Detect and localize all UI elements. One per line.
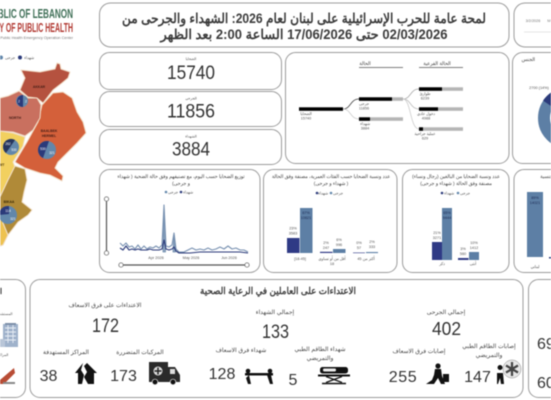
- bars: 18-45: 3583: [289, 232, 297, 236]
- map labels: BIKAA: [4, 200, 15, 204]
- panel: foreigners: [528, 280, 551, 398]
- chart legend: شهداء: [444, 190, 455, 196]
- stat: damaged vehicles: المركبات المتضررة: [116, 349, 164, 356]
- panel: adults by gender bar chart: [402, 170, 509, 272]
- panel: gender donut: الجنس: [522, 57, 535, 63]
- map pie: Bikaa: 114: [5, 209, 11, 213]
- bars: male: 21%: [433, 231, 441, 235]
- tree node: martyrs: [359, 117, 403, 130]
- bars: female: 1412: [470, 246, 478, 250]
- map pie: Mount Lebanon: 530: [11, 148, 17, 152]
- stat: ambulance team injuries: [389, 348, 446, 386]
- map legend: شهداء: [24, 55, 35, 60]
- slicer: status: الحالة: [359, 61, 371, 67]
- stat: medical staff martyrs: [289, 346, 346, 389]
- region: Baalbek-Hermel: [15, 92, 86, 181]
- tree node: total: [299, 107, 343, 120]
- map labels: BAALBEK: [41, 129, 58, 133]
- icon: running medic: [426, 363, 449, 384]
- stat: attacks on ambulance teams: [69, 302, 142, 337]
- map pie: North: 2: [18, 100, 20, 104]
- tree node: martyrs: شهداء: [360, 121, 371, 126]
- logo header: [0, 6, 74, 40]
- map pie: Baalbek-Hermel: [38, 141, 56, 159]
- chart title: [272, 174, 390, 187]
- stat: medical staff injuries: والتمريضي: [476, 352, 503, 359]
- stat: targeted centers: 38: [40, 368, 58, 385]
- bars: male: 9444: [443, 216, 451, 220]
- bars: under 18: 247: [323, 246, 329, 250]
- stat: ambulance team martyrs: شهداء فرق الاسعاف: [216, 347, 266, 354]
- bars: under 18: 2%: [323, 241, 329, 245]
- bars: over 45: 57: [357, 246, 361, 250]
- bars: 18-45: 10621: [301, 216, 311, 220]
- bar: Lebanese: [527, 192, 543, 269]
- bars: female: 560: [460, 252, 466, 256]
- bars: under 18: [318, 238, 346, 266]
- stat: ambulance team injuries: 255: [389, 369, 417, 386]
- tree node: regular admission: [417, 107, 463, 120]
- icon: ambulance: [149, 362, 180, 385]
- bars: male: 65%: [443, 211, 451, 215]
- stat: medical staff martyrs: والتمريضي: [307, 355, 334, 362]
- bars: female: 3%: [460, 247, 466, 251]
- logo header: Public Health Emergency Operation Center: [0, 36, 74, 40]
- panel: decomposition tree: [286, 52, 509, 164]
- stat: total wounded: 402: [432, 319, 461, 339]
- bars: female: 10%: [470, 241, 478, 245]
- chart title: مصنفة وفق الحالة ( شهداء و جرحى): [420, 181, 492, 187]
- chart legend: شهداء: [183, 190, 194, 194]
- stat: medical staff injuries: 147: [464, 369, 491, 386]
- chart title: و جرحى): [172, 181, 191, 187]
- stat: attacks on ambulance teams: 172: [92, 316, 119, 337]
- bars: under 18: 996: [336, 243, 342, 247]
- chart legend: [165, 190, 194, 194]
- chart title: ( شهداء و جرحى): [314, 181, 349, 187]
- map labels: HERMEL: [42, 134, 56, 138]
- KPI: wounded: الجرحى: [185, 96, 197, 100]
- stat: total martyrs: 133: [262, 322, 289, 343]
- chart legend: جرحى: [333, 192, 344, 196]
- map pie: North: [16, 95, 28, 107]
- map labels: NORTH: [9, 116, 22, 120]
- x axis labels: May 2026: [183, 256, 199, 260]
- vertical range slider: [104, 197, 109, 255]
- stat: targeted centers: [40, 349, 89, 385]
- region: North: [0, 91, 41, 136]
- tree node: total: 15740: [301, 116, 311, 120]
- bars: over 45: 333: [369, 245, 375, 249]
- chart title: توزيع الضحايا حسب اليوم، مع تصنيفهم وفق حالة الضحية ( شهداء: [117, 174, 245, 180]
- bars: female: [458, 241, 479, 266]
- map legend: جرحى: [5, 56, 16, 60]
- icon: hospital bed: [318, 367, 350, 384]
- icon: damaged center: [0, 368, 15, 384]
- icon: damaged house: [75, 363, 97, 384]
- stat: targeted centers: المراكز المستهدفة: [43, 349, 89, 356]
- stat: medical staff injuries: إصابات الطاقم الطبي: [462, 343, 516, 350]
- KPI: total casualties: 15740: [167, 63, 215, 84]
- tree node: martyrs: 3884: [361, 126, 369, 130]
- icon: stretcher carriers: [245, 369, 273, 384]
- bars: male: 3271: [433, 236, 441, 240]
- tree node: wounded: جرحى: [359, 102, 370, 106]
- tree node: regular admission: 4988: [422, 116, 430, 120]
- slicer: status: [359, 61, 403, 68]
- KPI: martyrs: [100, 130, 282, 164]
- chart legend: شهداء: [318, 190, 329, 196]
- line series: [120, 205, 248, 253]
- KPI: wounded: 11856: [167, 102, 215, 122]
- map pie: Mount Lebanon: 262: [5, 142, 11, 146]
- tree node: total: الضحايا: [300, 111, 312, 116]
- bars: 18-45: 67%: [302, 211, 310, 215]
- stat: total wounded: إجمالي الجرحى: [427, 309, 466, 316]
- tree node: surgery: 629: [422, 136, 428, 140]
- map pie: Mount Lebanon: [3, 139, 19, 155]
- tree node: emergency: طوارئ: [420, 91, 430, 96]
- panel heading: الاعتداءات على العاملين في الرعاية الصحية: [200, 286, 356, 297]
- panel: attacks on healthcare workers: [30, 280, 523, 398]
- chart title: [117, 174, 245, 187]
- tree node: regular admission: دخول عادي: [417, 111, 435, 116]
- chart title: عدد ونسبة الضحايا من البالغين (رجال ونساء): [412, 174, 500, 180]
- bars: 18-45: [18-45]: [294, 257, 306, 261]
- panel: gender donut: [512, 52, 551, 164]
- tree node: wounded: [359, 97, 403, 110]
- stat: medical staff martyrs: شهداء الطاقم الطبي: [294, 346, 346, 353]
- stat: total wounded: [427, 309, 466, 339]
- bar: Lebanese: لبناني: [531, 264, 539, 269]
- chart legend: جرحى: [460, 192, 471, 196]
- chart legend: جرحى: [168, 190, 179, 194]
- bars: under 18: أقل من أو تساوي: [318, 255, 346, 261]
- tree node: wounded: 11856: [359, 106, 369, 110]
- panel: title: [100, 3, 509, 47]
- stat: ambulance team injuries: إصابات فرق الاسعاف: [393, 348, 446, 355]
- x axis labels: Jun 2026: [221, 256, 237, 260]
- panel: date filter: [514, 3, 551, 47]
- bars: over 45: 2%: [369, 240, 375, 244]
- chart legend: [441, 190, 471, 196]
- bars: 18-45: 23%: [289, 226, 297, 230]
- bars: 18-45: [287, 208, 312, 261]
- stat: attacks on ambulance teams: الاعتداءات على فرق الاسعاف: [69, 302, 142, 309]
- KPI: martyrs: الشهداء: [185, 134, 197, 138]
- map pie: Baalbek-Hermel: 530: [40, 147, 46, 151]
- region: Mount Lebanon: [0, 131, 25, 197]
- stat: damaged vehicles: [110, 349, 164, 385]
- map pie: Baalbek-Hermel: 321: [49, 151, 55, 155]
- bars: over 45: [353, 240, 378, 261]
- map of Lebanon: [0, 63, 86, 246]
- KPI: total casualties: الضحايا: [186, 56, 196, 61]
- map labels: [0, 85, 58, 204]
- panel: age group bar chart: [264, 170, 397, 272]
- chart title: عدد ونسبة الضحايا حسب الفئات العمرية، مصنفة وفق الحالة: [272, 174, 390, 180]
- slicer: sub status: [419, 61, 463, 68]
- stat: medical staff martyrs: 5: [289, 372, 298, 389]
- map pie: North: 2: [25, 100, 27, 104]
- panel: gender donut: 2700 (14%): [529, 86, 550, 90]
- map pie: Bikaa: [0, 206, 17, 224]
- tree node: emergency: 6239: [421, 96, 429, 100]
- tree node: surgery: عملية جراحية: [415, 131, 435, 136]
- x axis labels: Apr 2026: [148, 256, 164, 260]
- heading line 1: لمحة عامة للحرب الإسرائيلية على لبنان لعام 2026: الشهداء والجرحى من: [122, 11, 486, 28]
- bars: over 45: 0%: [356, 241, 362, 245]
- tree connectors: [343, 89, 419, 129]
- bars: over 45: أكثر من 45: [357, 255, 375, 261]
- KPI: total casualties: [100, 52, 282, 90]
- stat: total martyrs: إجمالي الشهداء: [256, 309, 295, 316]
- tree node: emergency: [419, 87, 463, 100]
- map labels: AKKAR: [33, 85, 46, 89]
- stat: ambulance team martyrs: [209, 347, 266, 383]
- bars: under 18: 18: [330, 262, 334, 266]
- icon: medic with star of life: [497, 360, 521, 384]
- stat: total martyrs: [256, 309, 295, 343]
- bars: under 18: 6%: [336, 238, 342, 242]
- tree node: surgery: [415, 127, 463, 140]
- KPI: martyrs: 3884: [172, 140, 210, 160]
- panel: date filter: M: [547, 19, 551, 23]
- chart title: [412, 174, 500, 187]
- bar: Lebanese: 89%: [531, 196, 539, 200]
- horizontal range slider: [119, 263, 249, 267]
- heading line 2: 02/03/2026 حتى 17/06/2026 الساعة 2:00 بعد الظهر: [160, 27, 448, 43]
- chart legend: [316, 190, 344, 196]
- panel: nationality bar chart: [514, 170, 551, 272]
- stat: damaged vehicles: 173: [110, 368, 137, 385]
- panel: daily casualties line chart: [100, 170, 260, 272]
- x axis labels: [148, 256, 237, 260]
- slicer: sub status: الحالة الفرعية: [423, 61, 451, 67]
- stat: medical staff injuries: [462, 343, 516, 386]
- stat: ambulance team martyrs: 128: [209, 366, 235, 383]
- region: Bekaa: [0, 166, 32, 235]
- bars: male: ذكر: [438, 261, 445, 266]
- region: Akkar: [20, 63, 70, 103]
- donut chart: [544, 93, 551, 143]
- region: South yellow: [0, 180, 8, 246]
- KPI: wounded: [100, 92, 282, 126]
- map pie: Bikaa: 321: [10, 217, 16, 221]
- panel: facilities attacks: [0, 280, 26, 398]
- panel: date filter: 3/2/2026: [526, 19, 540, 23]
- bar: Lebanese: 14021: [530, 201, 540, 205]
- icon: hospital: [0, 323, 18, 347]
- bars: female: أنثى: [470, 260, 476, 266]
- map legend: [0, 55, 35, 60]
- bars: male: [432, 208, 452, 266]
